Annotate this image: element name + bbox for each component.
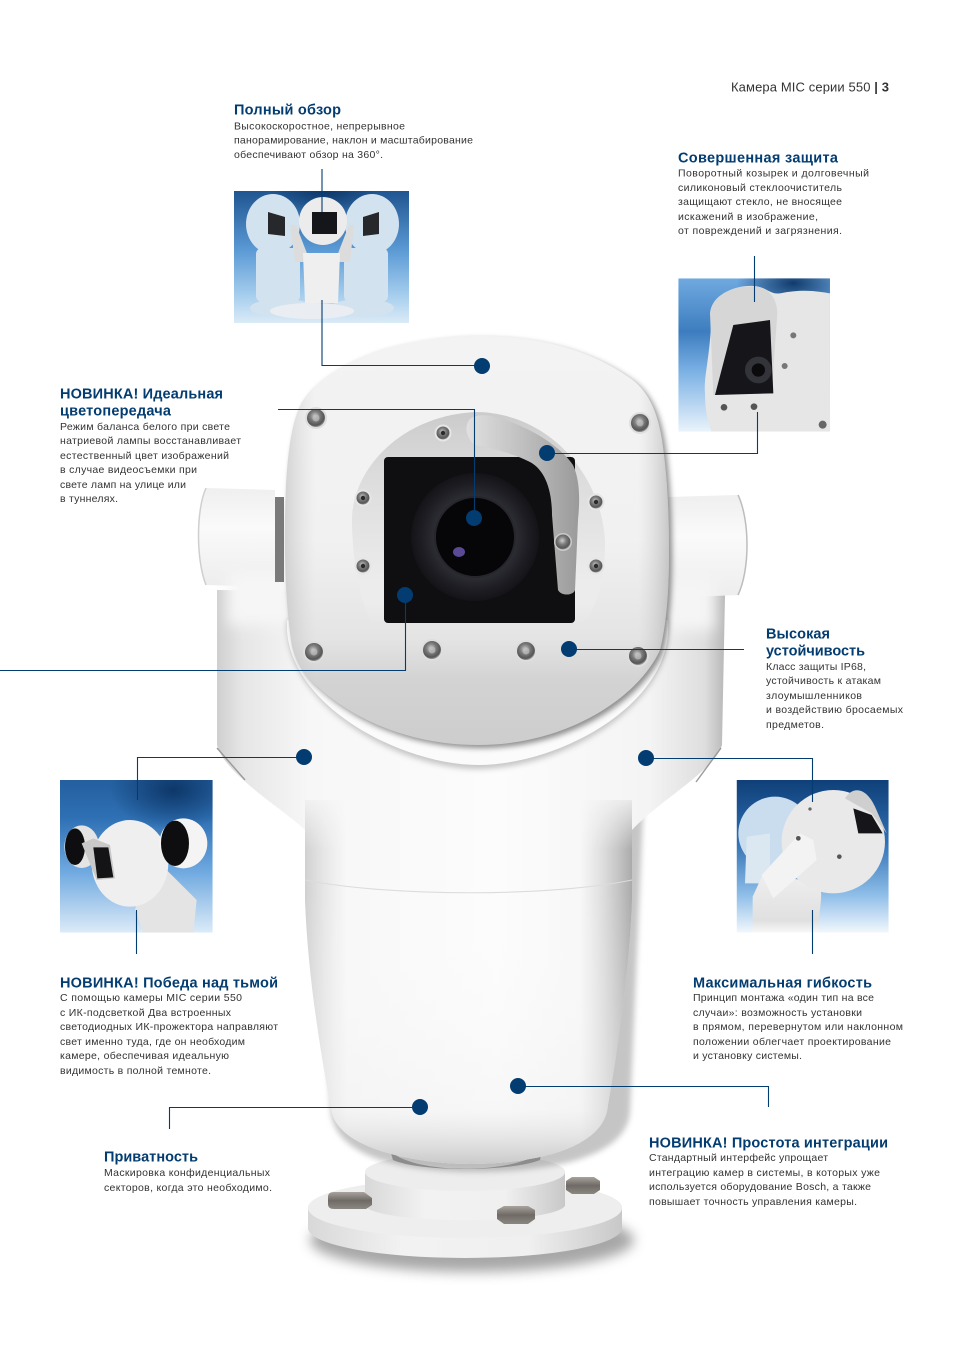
callout: robustness: предметов. (766, 719, 824, 731)
callout: victory over darkness: С помощью камеры MIC серии 550 (60, 992, 242, 1004)
callout: victory over darkness: с ИК-подсветкой Два встроенных (60, 1007, 232, 1019)
housing screws (303, 407, 651, 667)
callout: maximum flexibility: Принцип монтажа «один тип на все (693, 992, 874, 1004)
mounting flange (308, 1178, 622, 1258)
callout: victory over darkness: светодиодных ИК-прожектора направляют (60, 1021, 278, 1033)
callout: victory over darkness: НОВИНКА! Победа над тьмой (60, 976, 278, 992)
callout: maximum flexibility (693, 976, 903, 1062)
base neck (365, 1150, 565, 1220)
callout: perfect protection: Совершенная защита (678, 150, 839, 166)
callout: perfect protection (678, 150, 869, 237)
thumbnail: flexible mounting (737, 780, 889, 933)
callout: colour rendition: НОВИНКА! Идеальная (60, 386, 223, 402)
callout: maximum flexibility: положении облегчает проектирование (693, 1036, 891, 1048)
callout: full view: Высокоскоростное, непрерывное (234, 120, 405, 132)
callout: perfect protection: от повреждений и загрязнения. (678, 225, 842, 237)
callout: robustness: Класс защиты IP68, (766, 661, 866, 673)
camera head (285, 336, 672, 748)
callout: victory over darkness (60, 976, 278, 1077)
callout: robustness: устойчивость (766, 644, 865, 660)
right pivot cylinder (665, 495, 747, 630)
callout: privacy: Приватность (104, 1150, 198, 1166)
callout: colour rendition: в туннелях. (60, 493, 118, 505)
callout: colour rendition (60, 386, 241, 505)
leader line: robustness (561, 641, 744, 657)
wiper arm (466, 415, 579, 595)
flange bolts (328, 1177, 600, 1224)
leader line: full view (322, 169, 490, 374)
lens (411, 473, 539, 601)
callout: simple integration: повышает точность управления камеры. (649, 1196, 857, 1208)
callout: maximum flexibility: в прямом, перевернутом или наклонном (693, 1021, 903, 1033)
callout: full view (234, 102, 473, 161)
callout: simple integration: интеграцию камер в системы, в которых уже (649, 1167, 880, 1179)
callout: robustness: устойчивость к атакам (766, 675, 881, 687)
thumbnail: panoramic view (234, 191, 409, 323)
thumbnail: infrared illuminators (60, 780, 213, 932)
callout: victory over darkness: видимость в полной темноте. (60, 1065, 211, 1077)
callout: robustness: и воздействию бросаемых (766, 704, 904, 716)
callout: simple integration (649, 1136, 888, 1208)
visor recess (352, 412, 605, 625)
callout: full view: панорамирование, наклон и масштабирование (234, 134, 473, 146)
callout: colour rendition: естественный цвет изображений (60, 450, 229, 462)
callout: full view: обеспечивают обзор на 360°. (234, 149, 383, 161)
callout: colour rendition: Режим баланса белого при свете (60, 421, 230, 433)
callout: robustness: Высокая (766, 626, 830, 642)
callout: privacy: секторов, когда это необходимо. (104, 1182, 272, 1194)
yoke collar ring (287, 620, 668, 769)
callout: perfect protection: искажений в изображение, (678, 211, 818, 223)
callout: full view: Полный обзор (234, 102, 341, 118)
callout: simple integration: используется оборудование Bosch, а также (649, 1181, 871, 1193)
callout: maximum flexibility: Максимальная гибкость (693, 976, 872, 992)
callout: maximum flexibility: и установку системы. (693, 1050, 802, 1062)
callout: robustness: злоумышленников (766, 690, 862, 702)
callout: perfect protection: силиконовый стеклоочиститель (678, 182, 843, 194)
base drop shadow (310, 1208, 634, 1272)
callout: privacy: Маскировка конфиденциальных (104, 1167, 271, 1179)
callout: colour rendition: в случае видеосъемки при (60, 464, 197, 476)
callout: perfect protection: защищают стекло, не вносящее (678, 196, 842, 208)
leader line: darkness (136, 749, 312, 954)
callout: victory over darkness: свет именно туда, где он необходим (60, 1036, 245, 1048)
main camera illustration (198, 336, 747, 1272)
camera housing with yoke arms (217, 590, 725, 1172)
callout: perfect protection: Поворотный козырек и долговечный (678, 168, 869, 180)
callout: simple integration: НОВИНКА! Простота интеграции (649, 1136, 888, 1152)
leader line: flexibility (638, 750, 812, 954)
leader line: colour rendition (278, 410, 482, 526)
lens window (384, 457, 575, 623)
callout: victory over darkness: камере, обеспечивая идеальную (60, 1050, 229, 1062)
leader line: protection (539, 256, 758, 461)
left pivot cylinder (198, 488, 290, 625)
callout: colour rendition: цветопередача (60, 404, 172, 420)
leader line: privacy (170, 1099, 428, 1129)
callout: maximum flexibility: случаи»: возможность установки (693, 1007, 862, 1019)
callout: colour rendition: свете ламп на улице или (60, 479, 186, 491)
page header: Камера MIC серии 550 | 3 (731, 80, 889, 94)
leader line: integration (510, 1078, 768, 1107)
callout: simple integration: Стандартный интерфейс упрощает (649, 1152, 828, 1164)
thumbnail: visor (678, 278, 830, 432)
callout: robustness (766, 626, 904, 731)
callout: privacy (104, 1150, 272, 1194)
callout: colour rendition: натриевой лампы восстанавливает (60, 435, 241, 447)
leader line: left edge (0, 587, 413, 670)
